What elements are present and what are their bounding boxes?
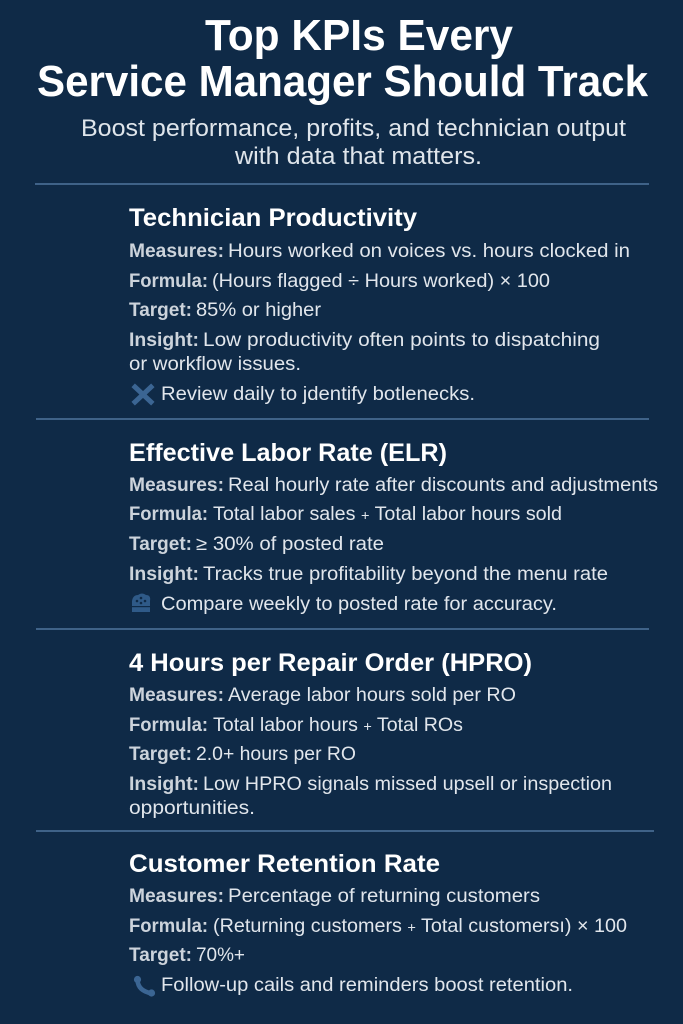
title: Top KPIs Every bbox=[205, 11, 514, 60]
formula row: Total labor hours + Total ROs bbox=[213, 715, 463, 736]
target row: Target: bbox=[129, 534, 192, 555]
insight row: Insight: bbox=[129, 330, 199, 351]
measures row: Measures: bbox=[129, 685, 224, 706]
tip text: Follow-up cails and reminders boost retention. bbox=[161, 975, 573, 996]
heading: effective labor rate: Effective Labor Rate (ELR) bbox=[129, 439, 447, 467]
formula row: (Returning customers + Total customersı) × 100 bbox=[213, 916, 627, 937]
title bbox=[37, 11, 648, 106]
insight row: Tracks true profitability beyond the menu rate bbox=[203, 564, 608, 585]
formula row: Formula: bbox=[129, 271, 208, 292]
insight row: opportunities. bbox=[129, 798, 255, 819]
formula row: Total labor sales + Total labor hours sold bbox=[213, 504, 562, 525]
insight row: Insight: bbox=[129, 774, 199, 795]
panel: effective labor rate bbox=[129, 439, 658, 615]
measures row: Measures: bbox=[129, 475, 224, 496]
icon: crossed tools bbox=[135, 387, 151, 402]
title: Service Manager Should Track bbox=[37, 57, 648, 106]
target row: 70%+ bbox=[196, 945, 245, 966]
measures row: Hours worked on voices vs. hours clocked in bbox=[228, 241, 630, 262]
formula row: (Hours flagged ÷ Hours worked) × 100 bbox=[212, 271, 550, 292]
target row bbox=[129, 534, 384, 555]
target row: Target: bbox=[129, 300, 192, 321]
target row bbox=[129, 300, 322, 321]
target row bbox=[129, 945, 245, 966]
target row: Target: bbox=[129, 945, 192, 966]
formula row: Formula: bbox=[129, 504, 208, 525]
measures row: Percentage of returning customers bbox=[228, 886, 540, 907]
icon: badge bbox=[132, 594, 150, 612]
measures row: Measures: bbox=[129, 886, 224, 907]
target row bbox=[129, 744, 356, 765]
heading: customer retention rate: Customer Retention Rate bbox=[129, 850, 440, 878]
panel: customer retention rate bbox=[129, 850, 627, 997]
target row: 2.0+ hours per RO bbox=[196, 744, 356, 765]
measures row: Average labor hours sold per RO bbox=[228, 685, 516, 706]
tip text: Review daily to jdentify botlenecks. bbox=[161, 384, 475, 405]
panel: hours per repair order bbox=[129, 649, 612, 819]
target row: Target: bbox=[129, 744, 192, 765]
insight row bbox=[129, 330, 600, 375]
measures row: Real hourly rate after discounts and adjustments bbox=[228, 475, 658, 496]
formula row: Formula: bbox=[129, 715, 208, 736]
insight row: Low productivity often points to dispatching bbox=[203, 330, 600, 351]
target row: ≥ 30% of posted rate bbox=[196, 534, 384, 555]
icon: phone bbox=[134, 976, 155, 997]
insight row: or workflow issues. bbox=[129, 354, 301, 375]
insight row bbox=[129, 774, 612, 819]
heading: technician productivity: Technician Productivity bbox=[129, 204, 417, 232]
heading: hours per repair order: 4 Hours per Repair Order (HPRO) bbox=[129, 649, 532, 677]
insight row: Low HPRO signals missed upsell or inspection bbox=[203, 774, 612, 795]
target row: 85% or higher bbox=[196, 300, 322, 321]
panel: technician productivity bbox=[129, 204, 630, 405]
formula row: Formula: bbox=[129, 916, 208, 937]
tip text: Compare weekly to posted rate for accuracy. bbox=[161, 594, 557, 615]
subtitle bbox=[81, 115, 626, 170]
insight row: Insight: bbox=[129, 564, 199, 585]
subtitle: with data that matters. bbox=[234, 143, 482, 170]
subtitle: Boost performance, profits, and technician output bbox=[81, 115, 626, 142]
measures row: Measures: bbox=[129, 241, 224, 262]
